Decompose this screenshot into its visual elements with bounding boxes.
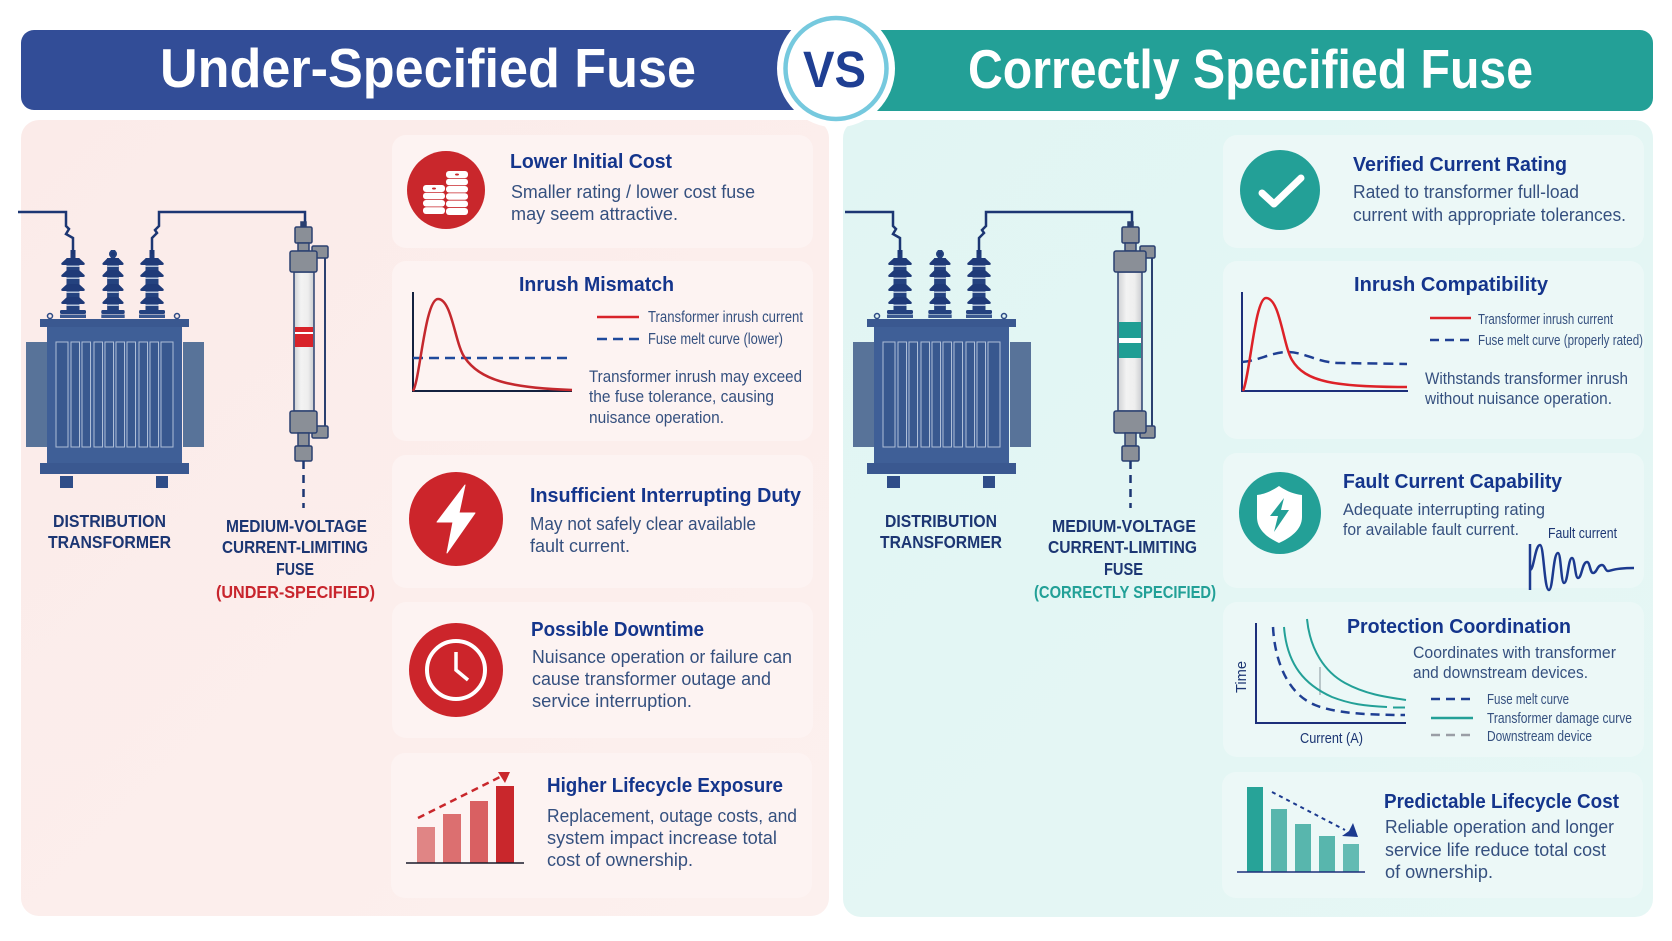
text: possible downtime [531, 618, 792, 711]
chart: rising cost bars [406, 772, 524, 863]
heading bar: correctly specified: Correctly Specified Fuse [968, 38, 1533, 100]
chart: time-current curves: Current (A) [1300, 730, 1363, 747]
text: lower initial cost: may seem attractive. [511, 203, 678, 224]
label: correctly specified fuse: CURRENT-LIMITING [1048, 537, 1197, 557]
text: protection coordination: and downstream devices. [1413, 663, 1588, 682]
text: predictable lifecycle cost: Predictable Lifecycle Cost [1384, 790, 1619, 813]
legend [597, 309, 804, 348]
legend [1431, 692, 1632, 745]
icon: lightning bolt [409, 472, 503, 566]
VS badge: VS [803, 41, 866, 98]
text: higher lifecycle exposure: Replacement, outage costs, and [547, 805, 797, 826]
text: fault current capability: Fault Current Capability [1343, 470, 1563, 493]
chart: inrush vs fuse melt curve [413, 292, 572, 391]
text: higher lifecycle exposure [547, 774, 797, 870]
chart: fault current waveform: Fault current [1548, 525, 1618, 542]
icon: coins [407, 151, 485, 229]
text: predictable lifecycle cost: of ownership. [1385, 861, 1493, 882]
chart: time-current curves [1233, 619, 1406, 747]
legend: Transformer inrush current [648, 309, 804, 326]
chart: falling cost bars [1237, 787, 1365, 872]
legend: Transformer inrush current [1478, 311, 1614, 328]
text: fault current capability: for available fault current. [1343, 520, 1519, 539]
label: distribution transformer (right): DISTRIBUTION [885, 511, 997, 531]
diagram: correctly specified fuse [1114, 222, 1155, 508]
legend: Downstream device [1487, 729, 1592, 745]
text: insufficient interrupting duty: May not safely clear available [530, 513, 756, 534]
text: verified current rating: Verified Current Rating [1353, 153, 1567, 176]
label: distribution transformer: DISTRIBUTION [53, 511, 166, 531]
card: fault current capability [1223, 453, 1644, 590]
text: lower initial cost [510, 150, 755, 224]
text: predictable lifecycle cost [1384, 790, 1619, 882]
diagram: under-specified fuse [290, 222, 328, 508]
card: insufficient interrupting duty [392, 455, 813, 588]
icon: check mark [1240, 150, 1320, 230]
card: verified current rating [1223, 135, 1644, 248]
text: predictable lifecycle cost: Reliable operation and longer [1385, 816, 1614, 837]
label: distribution transformer: TRANSFORMER [48, 532, 171, 552]
label: under-specified fuse [216, 516, 375, 602]
label: distribution transformer [48, 511, 171, 552]
title: inrush mismatch: Inrush Mismatch [519, 273, 674, 296]
heading bar: correctly specified [860, 30, 1653, 111]
text: protection coordination: Coordinates with transformer [1413, 643, 1616, 662]
text: predictable lifecycle cost: service life reduce total cost [1385, 839, 1606, 860]
label: correctly specified fuse: MEDIUM-VOLTAGE [1052, 516, 1196, 536]
text: inrush compatibility: without nuisance operation. [1424, 389, 1612, 408]
label: correctly specified fuse [1034, 516, 1216, 602]
VS badge [777, 10, 895, 128]
chart: inrush vs properly rated fuse curve [1242, 292, 1408, 391]
label: under-specified fuse: FUSE [276, 559, 314, 579]
label: correctly specified fuse: FUSE [1104, 559, 1143, 579]
text: verified current rating [1353, 153, 1626, 225]
card: possible downtime [392, 602, 813, 738]
heading bar: under-specified: Under-Specified Fuse [160, 37, 696, 99]
text: inrush compatibility [1424, 369, 1628, 408]
title: inrush compatibility: Inrush Compatibility [1354, 273, 1549, 296]
card: predictable lifecycle cost [1222, 772, 1643, 898]
text: insufficient interrupting duty: fault current. [530, 535, 630, 556]
text: possible downtime: Nuisance operation or failure can [532, 646, 792, 667]
text: higher lifecycle exposure: cost of ownership. [547, 849, 693, 870]
text: lower initial cost: Smaller rating / lower cost fuse [511, 181, 755, 202]
chart: time-current curves: Time [1233, 661, 1250, 693]
legend: Transformer damage curve [1487, 711, 1632, 727]
heading bar: under-specified [21, 30, 811, 110]
diagram: under-specified transformer [18, 212, 305, 488]
text: fault current capability [1343, 470, 1563, 539]
card: inrush compatibility [1223, 261, 1644, 439]
card: higher lifecycle exposure [391, 753, 812, 898]
text: insufficient interrupting duty [530, 484, 802, 556]
text: inrush compatibility: Withstands transformer inrush [1425, 369, 1628, 388]
text: verified current rating: current with appropriate tolerances. [1353, 204, 1626, 225]
legend: Fuse melt curve [1487, 692, 1569, 708]
text: inrush mismatch [589, 367, 802, 427]
card: lower initial cost [392, 135, 813, 248]
text: fault current capability: Adequate interrupting rating [1343, 500, 1545, 519]
text: inrush mismatch: Transformer inrush may exceed [589, 367, 802, 386]
card: protection coordination [1223, 602, 1644, 757]
icon: clock [409, 623, 503, 717]
title: protection coordination: Protection Coordination [1347, 615, 1571, 638]
text: possible downtime: service interruption. [532, 690, 692, 711]
text: inrush mismatch: the fuse tolerance, causing [589, 387, 774, 406]
text: lower initial cost: Lower Initial Cost [510, 150, 672, 173]
label: correctly specified fuse: (CORRECTLY SPECIFIED) [1034, 582, 1216, 602]
chart: fault current waveform [1530, 525, 1634, 590]
text: possible downtime: Possible Downtime [531, 618, 704, 641]
text: higher lifecycle exposure: Higher Lifecycle Exposure [547, 774, 783, 797]
text: possible downtime: cause transformer outage and [532, 668, 771, 689]
label: under-specified fuse: (UNDER-SPECIFIED) [216, 582, 375, 602]
legend: Fuse melt curve (lower) [648, 331, 783, 348]
icon: shield [1239, 472, 1321, 554]
diagram: correctly specified transformer [845, 212, 1132, 488]
panel: correctly specified background [843, 120, 1653, 917]
panel: under-specified background [21, 120, 829, 916]
card: inrush mismatch [392, 261, 813, 441]
text: insufficient interrupting duty: Insufficient Interrupting Duty [530, 484, 802, 507]
text: protection coordination [1413, 643, 1616, 682]
label: under-specified fuse: MEDIUM-VOLTAGE [226, 516, 367, 536]
text: higher lifecycle exposure: system impact increase total [547, 827, 777, 848]
label: under-specified fuse: CURRENT-LIMITING [222, 537, 368, 557]
label: distribution transformer (right): TRANSFORMER [880, 532, 1002, 552]
legend [1430, 311, 1643, 349]
label: distribution transformer (right) [880, 511, 1002, 552]
text: inrush mismatch: nuisance operation. [589, 408, 724, 427]
text: verified current rating: Rated to transformer full-load [1353, 181, 1579, 202]
